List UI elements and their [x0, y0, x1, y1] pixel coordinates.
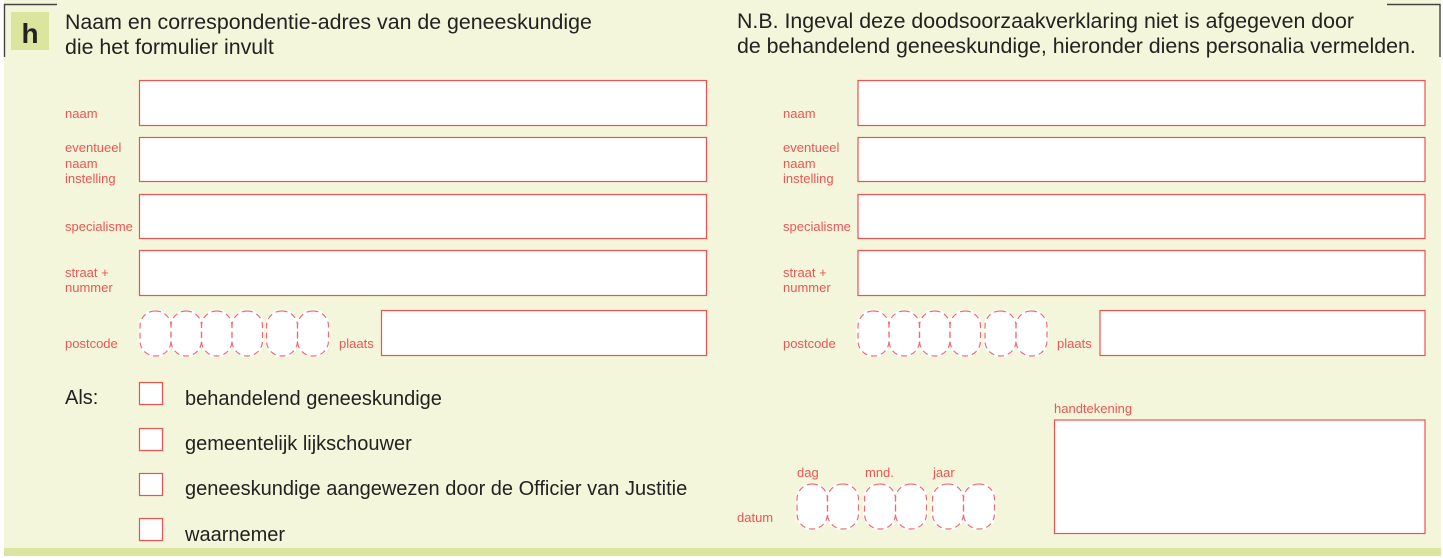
field: straat + nummer: straat + [65, 265, 109, 280]
field: eventueel naam instelling: naam [783, 156, 816, 171]
field: handtekening: handtekening [1054, 401, 1132, 416]
corner mark: top right [1387, 4, 1440, 57]
field: specialisme: specialisme [65, 219, 133, 234]
option: waarnemer [140, 518, 285, 546]
option: gemeentelijk lijkschouwer [140, 428, 412, 455]
heading: right column: N.B. Ingeval deze doodsoorzaakverklaring niet is afgegeven door [737, 9, 1354, 33]
heading: left column: Naam en correspondentie-adres van de geneeskundige [65, 10, 592, 34]
field: datum [737, 465, 994, 529]
field: datum: jaar [932, 465, 955, 480]
field: specialisme: specialisme [783, 219, 851, 234]
field: naam: naam [65, 106, 98, 121]
section badge h [11, 12, 49, 50]
field: eventueel naam instelling: eventueel [65, 140, 121, 155]
bottom band [4, 548, 1441, 556]
field: plaats [1057, 310, 1425, 356]
heading: right column: de behandelend geneeskundige, hieronder diens personalia vermelden. [737, 34, 1416, 58]
field: postcode: postcode [783, 336, 836, 351]
field: eventueel naam instelling: eventueel [783, 140, 839, 155]
field: straat + nummer: straat + [783, 265, 827, 280]
field: datum: dag [797, 465, 819, 480]
field: specialisme [783, 194, 1425, 238]
field: eventueel naam instelling: naam [65, 156, 98, 171]
field: datum: mnd. [865, 465, 894, 480]
field: plaats: plaats [339, 336, 374, 351]
option: waarnemer: waarnemer [184, 524, 285, 546]
field: plaats [339, 310, 706, 356]
field: straat + nummer: nummer [783, 280, 831, 295]
field: postcode [783, 311, 1047, 356]
field: straat + nummer: nummer [65, 280, 113, 295]
corner mark: top left [4, 4, 57, 57]
field: postcode: postcode [65, 336, 118, 351]
field: naam [783, 80, 1425, 126]
field: naam: naam [783, 106, 816, 121]
field: straat + nummer [783, 250, 1425, 296]
field: eventueel naam instelling: instelling [65, 171, 116, 186]
section badge h: h [21, 18, 39, 49]
field: naam [65, 80, 706, 126]
field: eventueel naam instelling [783, 138, 1425, 186]
field: plaats: plaats [1057, 336, 1092, 351]
field: postcode [65, 311, 328, 356]
field: eventueel naam instelling: instelling [783, 171, 834, 186]
panel: right personal details [783, 80, 1425, 356]
option: geneeskundige aangewezen: geneeskundige aangewezen door de Officier van Justitie [185, 478, 687, 500]
field: specialisme [65, 194, 706, 238]
field: eventueel naam instelling [65, 138, 706, 186]
field: datum: datum [737, 510, 773, 525]
field: straat + nummer [65, 250, 706, 296]
option: gemeentelijk lijkschouwer: gemeentelijk lijkschouwer [185, 433, 412, 455]
option: behandelend geneeskundige: behandelend geneeskundige [185, 388, 442, 410]
option: behandelend geneeskundige [140, 382, 442, 410]
heading: left column: die het formulier invult [65, 35, 274, 59]
panel: left personal details [65, 80, 706, 356]
panel: role checkboxes [65, 382, 687, 546]
field: handtekening [1054, 401, 1425, 534]
label: Als: Als: [65, 387, 98, 409]
